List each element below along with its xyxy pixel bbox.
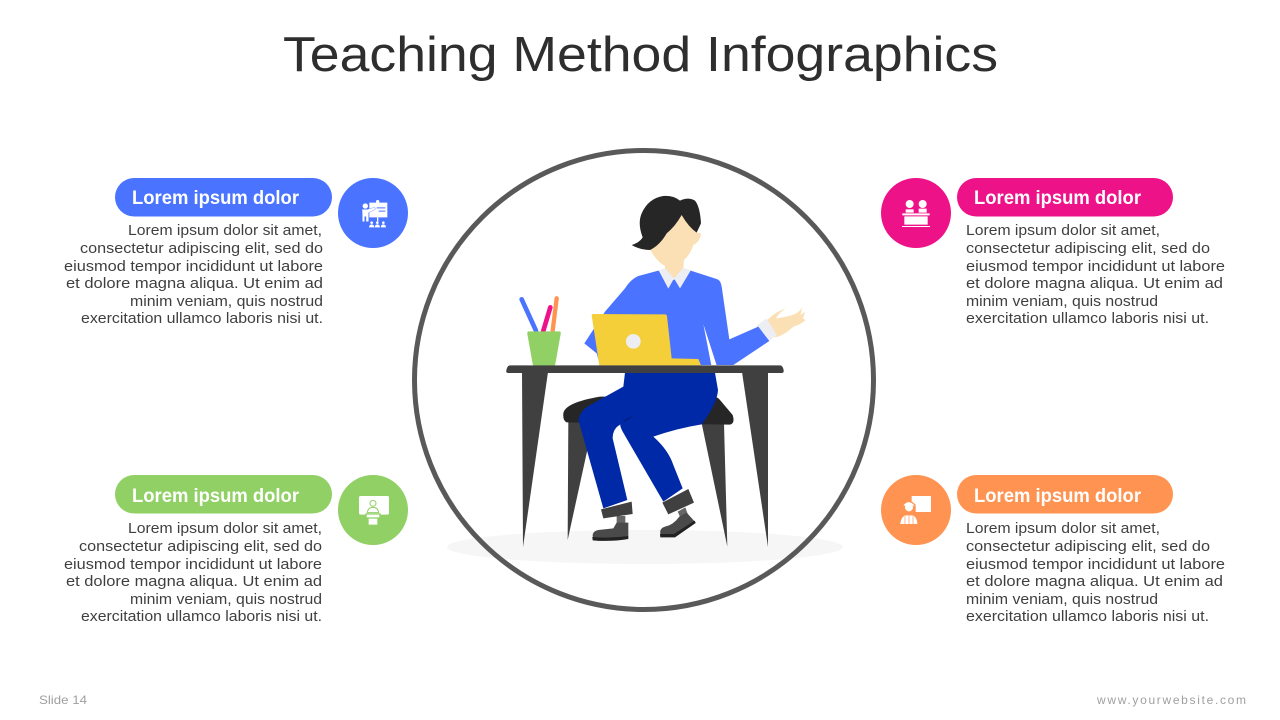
icon: teacher with speech board <box>881 475 951 545</box>
icon: presenter with board <box>338 178 408 248</box>
pink body text: et dolore magna aliqua. Ut enim ad <box>966 275 1223 292</box>
orange heading pill <box>957 475 1173 514</box>
pencil cup <box>527 331 561 367</box>
pink body text: consectetur adipiscing elit, sed do <box>966 240 1210 257</box>
upper body, desk items <box>506 196 806 373</box>
knee crease <box>623 416 634 422</box>
blue body text: consectetur adipiscing elit, sed do <box>80 240 323 257</box>
floor shadow <box>447 530 843 564</box>
pink body text: minim veniam, quis nostrud <box>966 293 1158 310</box>
orange heading: Lorem ipsum dolor <box>974 486 1142 507</box>
orange body text: minim veniam, quis nostrud <box>966 591 1158 608</box>
green body text: consectetur adipiscing elit, sed do <box>79 538 322 555</box>
green heading pill <box>115 475 332 514</box>
green body text: et dolore magna aliqua. Ut enim ad <box>66 573 322 590</box>
footer: slide number: Slide 14 <box>39 693 87 707</box>
desk top <box>506 365 784 373</box>
green body text: eiusmod tempor incididunt ut labore <box>64 556 322 573</box>
sleeve cuff <box>756 318 777 341</box>
icon: two people at desk <box>881 178 951 248</box>
trousers <box>578 373 718 508</box>
blue heading pill <box>115 178 332 216</box>
green body text <box>64 520 322 625</box>
hand <box>765 307 806 337</box>
ankles <box>617 507 689 525</box>
collar <box>659 268 691 289</box>
stool and lower body <box>563 373 734 547</box>
orange body text <box>966 520 1225 625</box>
orange body text: Lorem ipsum dolor sit amet, <box>966 520 1160 537</box>
pencils <box>522 298 557 331</box>
pink heading pill <box>957 178 1173 216</box>
panel: orange bottom right <box>881 475 1225 625</box>
orange body text: exercitation ullamco laboris nisi ut. <box>966 608 1209 625</box>
green body text: exercitation ullamco laboris nisi ut. <box>81 608 322 625</box>
orange body text: eiusmod tempor incididunt ut labore <box>966 556 1225 573</box>
title: Teaching Method Infographics <box>283 28 998 82</box>
panel: pink top right <box>881 178 1225 327</box>
cuffs <box>601 489 694 518</box>
sweater <box>584 271 769 365</box>
central illustration: teacher at desk <box>414 150 874 610</box>
panel: blue top left <box>64 178 408 327</box>
panel: green bottom left <box>64 475 408 625</box>
blue body text: eiusmod tempor incididunt ut labore <box>64 258 323 275</box>
ring frame <box>414 150 874 610</box>
blue body text: Lorem ipsum dolor sit amet, <box>128 222 322 239</box>
blue heading: Lorem ipsum dolor <box>132 188 300 209</box>
sweater fold <box>703 324 717 365</box>
stool <box>563 397 734 547</box>
blue body text: exercitation ullamco laboris nisi ut. <box>81 310 323 327</box>
icon: speaker at podium <box>338 475 408 545</box>
shoes <box>593 513 696 539</box>
pink body text: eiusmod tempor incididunt ut labore <box>966 258 1225 275</box>
green heading: Lorem ipsum dolor <box>132 486 300 507</box>
pink heading: Lorem ipsum dolor <box>974 188 1142 209</box>
green body text: minim veniam, quis nostrud <box>130 591 322 608</box>
blue body text: minim veniam, quis nostrud <box>130 293 323 310</box>
laptop <box>592 314 701 365</box>
green body text: Lorem ipsum dolor sit amet, <box>128 520 322 537</box>
pink body text <box>966 222 1225 327</box>
desk legs <box>522 372 768 547</box>
hair <box>632 196 701 250</box>
neck and face <box>650 215 701 279</box>
footer: website: www.yourwebsite.com <box>1096 693 1246 707</box>
pink body text: exercitation ullamco laboris nisi ut. <box>966 310 1209 327</box>
pink body text: Lorem ipsum dolor sit amet, <box>966 222 1160 239</box>
orange body text: et dolore magna aliqua. Ut enim ad <box>966 573 1223 590</box>
blue body text <box>64 222 323 327</box>
orange body text: consectetur adipiscing elit, sed do <box>966 538 1210 555</box>
blue body text: et dolore magna aliqua. Ut enim ad <box>66 275 323 292</box>
